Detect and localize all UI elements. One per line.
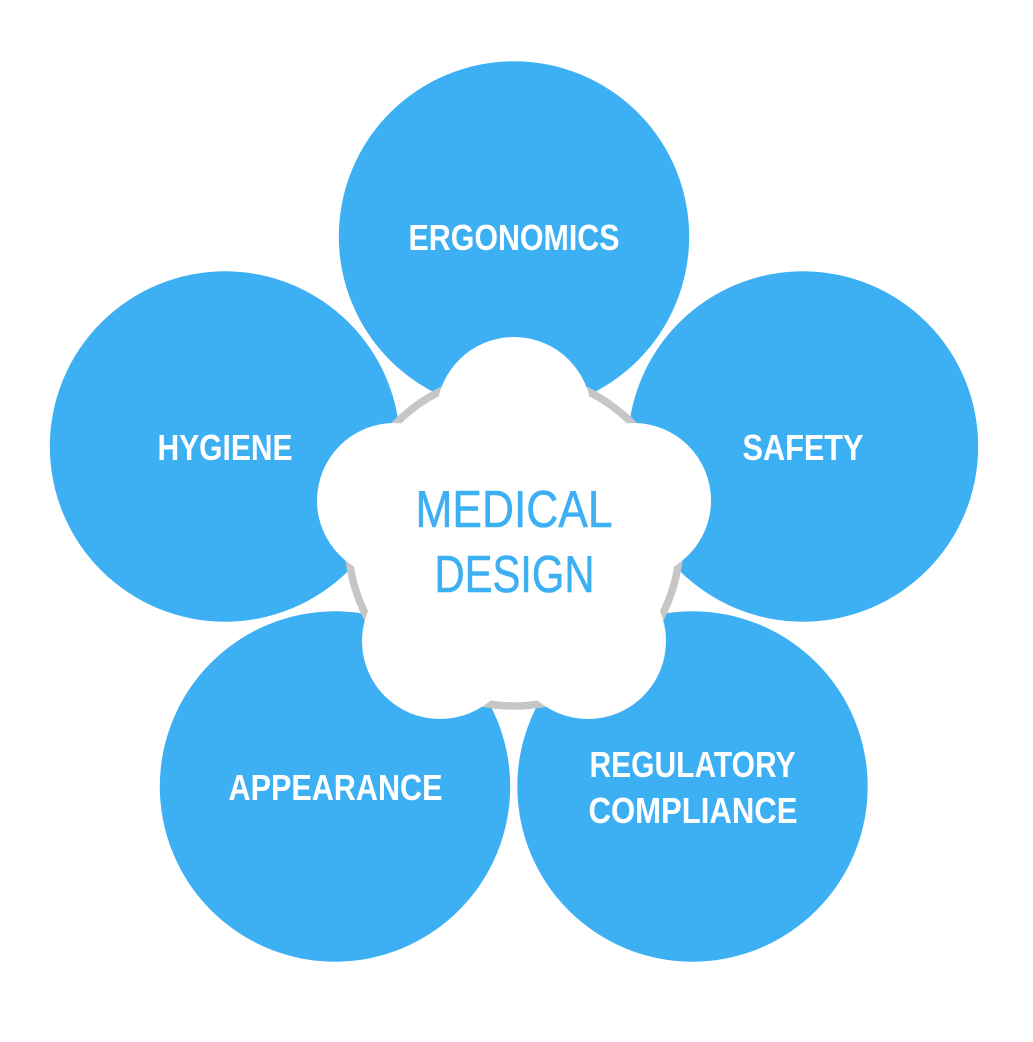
grey ring [348,374,680,706]
circle: hygiene [50,271,400,622]
center title [416,481,612,604]
circle: ergonomics: ERGONOMICS [408,217,620,258]
center title: MEDICAL [416,481,612,539]
circle: ergonomics [339,61,689,412]
circle: regulatory compliance: REGULATORY [590,744,796,785]
circle: appearance: APPEARANCE [228,767,442,808]
circle: regulatory compliance: COMPLIANCE [588,790,798,831]
circle: appearance [160,611,510,962]
center title: DESIGN [434,546,594,604]
center flower [317,337,711,719]
circle: safety: SAFETY [742,427,864,468]
circle: regulatory compliance [517,611,868,962]
circle: safety [628,271,978,622]
circle: hygiene: HYGIENE [158,427,292,468]
